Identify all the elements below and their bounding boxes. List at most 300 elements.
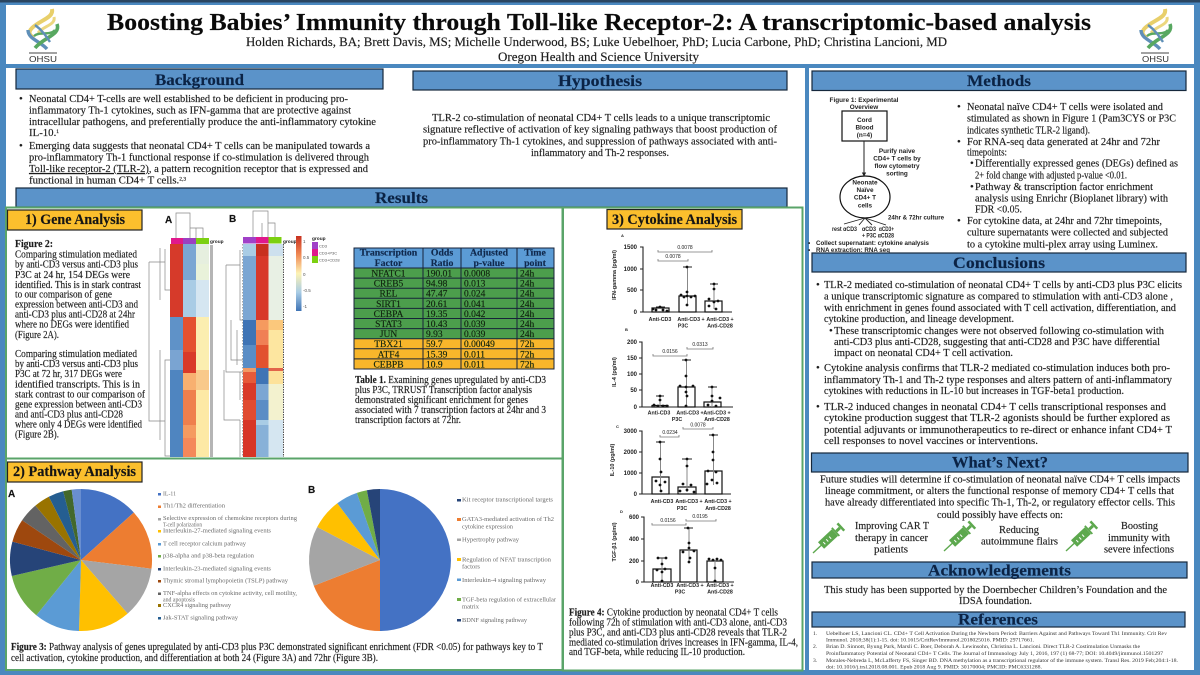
figure 4 caption: following 72h of stimulation with anti-CD3 alone, anti-CD3 <box>569 618 787 628</box>
heatmap legend: CD3 <box>319 244 328 248</box>
table 1: transcription factors <box>354 248 554 370</box>
background text: intracellular pathogens, and preferentially produce the anti-inflammatory cytokine <box>29 116 376 128</box>
pie A legend: T cell receptor calcium pathway <box>163 540 247 547</box>
figure 1: experimental overview flowchart: Neonate <box>852 180 878 186</box>
chart: IL-4 <box>612 327 733 423</box>
figure 4 caption: Figure 4: Cytokine production by neonatal CD4+ T cells <box>569 608 778 619</box>
methods text: Pathway & transcription factor enrichment <box>975 181 1153 193</box>
background text <box>19 93 376 186</box>
pie B legend: cytokine expression <box>462 523 514 530</box>
chart: IFN-gamma: 0.0078 <box>665 254 681 260</box>
conclusions text: • <box>816 401 820 413</box>
table 1: transcription factors: Ratio <box>431 258 454 269</box>
pie B legend: Interleukin-4 signaling pathway <box>462 577 547 584</box>
chart: IFN-gamma: Anti-CD3 + <box>706 317 734 323</box>
figure 1: experimental overview flowchart: cells <box>858 202 873 210</box>
conclusions text: Cytokine analysis confirms that TLR-2 mediated co-stimulation induces both pro- <box>824 362 1170 374</box>
figure 2 text <box>15 239 145 440</box>
chart: IL-10: P3C <box>677 506 687 512</box>
conclusions text: • <box>816 362 820 374</box>
acknowledgements text: This study has been supported by the Doernbecher Children’s Foundation and the <box>824 584 1167 596</box>
references list: Brian D. Sinnott, Byung Park, Marsli C. Boer, Deborah A. Lewinsohn, Christina L. Lancioni. Direct TLR-2 Costimulation Unmasks the <box>826 644 1141 650</box>
pie A legend: Jak-STAT signaling pathway <box>163 614 239 621</box>
figure 2 text: (Figure 2B). <box>15 429 59 440</box>
figure 2 text: where no DEGs were identified <box>15 320 130 331</box>
chart: TGF-beta1: 400 <box>629 537 640 543</box>
chart: IL-4: 150 <box>627 356 638 362</box>
chart: IL-10: 1000 <box>624 471 638 477</box>
conclusions text: anti-CD3 plus anti-CD28, suggesting that anti-CD28 and P3C have differential <box>834 336 1160 348</box>
table 1: transcription factors: 59.7 <box>426 340 443 350</box>
table 1: transcription factors: 72h <box>520 360 534 370</box>
figure 2 text: to our comparison of gene <box>15 290 112 301</box>
methods text: indicates synthetic TLR-2 ligand). <box>967 124 1090 136</box>
methods heading: Methods <box>967 73 1031 90</box>
panel: conclusions <box>812 253 1186 447</box>
methods text: stimulated as shown in Figure 1 (Pam3CYS or P3C <box>967 113 1176 125</box>
conclusions text: cytokine production, and lineage development. <box>824 313 1014 325</box>
pie A legend: Th1/Th2 differentiation <box>163 503 226 510</box>
hypothesis text: pro-inflammatory Th-1 cytokines, and suppression of pathways associated with anti- <box>423 136 777 148</box>
conclusions text <box>816 279 1182 447</box>
figure 1: experimental overview flowchart: CD4+ T cells by <box>873 156 921 162</box>
figure 2 text: P3C at 72 hr, 317 DEGs were <box>15 369 122 380</box>
table 1: transcription factors: 24h <box>520 320 534 330</box>
improvement text: infections: immunity with <box>1108 532 1170 544</box>
table 1: transcription factors: 24h <box>520 290 534 300</box>
references list: Uebelhoer LS, Lancioni CL. CD4+ T Cell Activation During the Newborn Period: Barriers Against and Pathways Toward Th1 Immunity. Crit Rev <box>826 631 1167 637</box>
table 1: transcription factors: 0.011 <box>464 360 485 370</box>
conclusions text: impact on neonatal CD4+ T cell activation. <box>834 347 1013 359</box>
figure 3 caption: cell activation, cytokine production, and differentiation at both 24 (Figure 3A) and 72hr (Figure 3B). <box>11 653 378 664</box>
background text: 1 <box>56 129 59 135</box>
chart: IL-4: 0.0313 <box>692 342 708 348</box>
table 1: transcription factors: REL <box>380 290 398 300</box>
figure 2 text: (Figure 2A). <box>15 330 59 341</box>
figure 2 text: identified. This is in stark contrast <box>15 280 141 291</box>
pie A legend: and apoptosis <box>163 597 195 604</box>
figure 1: experimental overview flowchart <box>808 97 944 254</box>
chart: TGF-beta1: Anti-CD28 <box>707 590 733 596</box>
logo: OHSU right <box>1141 9 1171 64</box>
acknowledgements heading <box>812 562 1187 580</box>
heatmap legend: 0.5 <box>303 255 310 260</box>
table 1: transcription factors: 0.039 <box>464 320 486 330</box>
figure 2 text: Figure 2: <box>15 239 53 250</box>
pie chart B: B <box>308 485 315 496</box>
references heading: References <box>958 612 1038 628</box>
pie B legend: matrix <box>462 604 480 611</box>
table 1: transcription factors: 0.039 <box>464 330 486 340</box>
figure 1: experimental overview flowchart: Purify naive <box>879 148 916 155</box>
pie B legend <box>457 497 557 624</box>
conclusions heading: Conclusions <box>953 255 1045 272</box>
references list: 3. <box>813 658 818 664</box>
table 1: transcription factors: 24h <box>520 280 534 290</box>
figure 2 text: by anti-CD3 versus anti-CD3 plus <box>15 259 138 270</box>
heatmap legend: -1 <box>303 304 307 309</box>
methods text: • <box>970 181 974 193</box>
improvement text: CAR T: therapy in cancer <box>855 532 928 544</box>
conclusions text: with enrichment in genes found associated with T cell activation, differentiation, and <box>824 302 1177 314</box>
methods text: culture supernatants were collected and subjected <box>967 227 1169 239</box>
conclusions heading <box>812 253 1186 272</box>
heatmap B: B <box>229 214 236 225</box>
table 1: transcription factors: Factor <box>375 258 403 269</box>
pie B legend: GATA3-mediated activation of Th2 <box>462 516 554 523</box>
figure 1: experimental overview flowchart: rest αCD3 <box>832 227 858 233</box>
figure 1: experimental overview flowchart: CD4+ T <box>854 195 876 202</box>
improvement text: infections <box>1104 520 1174 556</box>
chart: IFN-gamma: 1000 <box>624 267 638 273</box>
conclusions text: inflammatory Th-1 and Th-2 type responses and alters pattern of anti-inflammatory <box>824 374 1173 386</box>
figure 2 text: stark contrast to our comparison of <box>15 389 145 400</box>
figure 4 caption: plus P3C, and anti-CD3 plus anti-CD28 reveals that TLR-2 <box>569 628 787 638</box>
chart: TGF-beta1: 600 <box>629 515 640 521</box>
chart: IFN-gamma: Anti-CD3 + <box>677 317 705 323</box>
table 1: transcription factors: CEBPA <box>374 310 404 320</box>
improvement text: CAR T: Improving CAR T <box>855 520 929 532</box>
heatmap B: group <box>283 239 297 245</box>
panel: cytokine analysis <box>563 208 802 670</box>
chart: TGF-beta1: P3C <box>675 590 685 596</box>
pie A legend: Thymic stromal lymphopoietin (TSLP) pathway <box>163 578 289 585</box>
methods text: • <box>957 215 961 227</box>
pie A legend: Selective expression of chemokine receptors during <box>163 515 298 522</box>
panel: hypothesis <box>413 71 787 159</box>
figure 2 text: where only 4 DEGs were identified <box>15 420 143 431</box>
icon: syringe 2 <box>940 520 976 555</box>
table 1: transcription factors: Odds <box>431 248 453 258</box>
chart: IL-4: 0 <box>634 405 638 411</box>
background text: functional in human CD4+ T cells. <box>29 174 179 186</box>
table 1: transcription factors: 19.35 <box>426 310 448 320</box>
chart: IL-4: 0.0156 <box>662 349 678 355</box>
figure 2 text: anti-CD3 plus anti-CD28 at 24hr <box>15 309 135 320</box>
conclusions text: cytokines with reductions in IL-10 but increases in TGF-beta1 production. <box>824 385 1124 397</box>
hypothesis text: TLR-2 co-stimulation of neonatal CD4+ T cells leads to a unique transcriptomic <box>432 112 770 124</box>
table 1: transcription factors: JUN <box>380 330 397 340</box>
chart: IL-10: 3000 <box>624 429 638 435</box>
pie A legend: IL-11 <box>163 490 176 498</box>
chart: IFN-gamma: 0.0078 <box>677 245 693 251</box>
conclusions text: TLR-2 mediated co-stimulation of neonatal CD4+ T cells by anti-CD3 plus P3C elicits <box>824 279 1182 291</box>
methods text: FDR <0.05. <box>975 203 1022 215</box>
table 1: transcription factors: ATF4 <box>378 350 400 360</box>
background text: 2,3 <box>179 176 186 182</box>
figure 1: experimental overview flowchart: Blood <box>855 124 874 132</box>
table 1 caption: Table 1. Examining genes upregulated by anti-CD3 <box>355 375 546 386</box>
references list: Immunol. 2018;38(1):1-15. doi: 10.1615/CritRevImmunol.2018025016. PMID: 29717661. <box>826 637 1035 644</box>
chart: IL-10: 2000 <box>624 450 638 456</box>
figure 2 text: identified transcripts. This is in <box>15 379 141 390</box>
figure 1: experimental overview flowchart: RNA extraction: RNA seq <box>816 247 890 254</box>
figure 4 caption <box>569 608 798 658</box>
improvement text: autoimmune: autoimmune flairs <box>981 536 1058 548</box>
what's next text: could possibly have effects on: <box>937 509 1063 521</box>
chart: TGF-beta1: 200 <box>629 559 640 565</box>
table 1: transcription factors: 94.98 <box>426 280 448 290</box>
table 1: transcription factors: p-value <box>473 258 505 269</box>
what's next text: Future studies will determine if co-stimulation of neonatal naïve CD4+ T cells impacts <box>820 474 1180 486</box>
chart: TGF-beta1 <box>612 509 734 596</box>
figure 2 text: and anti-CD3 plus anti-CD28 <box>15 409 123 420</box>
chart: IL-10: Anti-CD28 <box>705 506 731 512</box>
table 1: transcription factors: TBX21 <box>374 340 403 350</box>
table 1: transcription factors: 9.93 <box>426 330 443 340</box>
pie A legend: CXCR4 signaling pathway <box>163 602 232 609</box>
conclusions text: cytokine production suggest that TLR-2 agonists should be further explored as <box>824 412 1170 424</box>
chart: TGF-beta1: 0 <box>636 580 640 586</box>
results banner: Results <box>375 190 428 207</box>
figure 1: experimental overview flowchart: • <box>808 247 811 254</box>
chart: IFN-gamma <box>612 233 734 330</box>
chart: IL-10: 0 <box>634 492 638 498</box>
chart: TGF-beta1: Anti-CD3 <box>651 583 673 589</box>
panel: what's next <box>809 453 1188 557</box>
table 1: transcription factors: 0.041 <box>464 300 486 310</box>
methods heading <box>812 71 1186 90</box>
pie B legend: TGF-beta regulation of extracellular <box>462 597 557 604</box>
pie B legend: Regulation of NFAT transcription <box>462 556 552 563</box>
table 1: transcription factors: 47.47 <box>426 290 448 300</box>
table 1: transcription factors: SIRT1 <box>376 300 401 310</box>
panel: pathway analysis <box>6 458 562 670</box>
logo: OHSU left <box>28 9 58 64</box>
chart: IFN-gamma: IFN-gamma (pg/ml) <box>612 250 618 300</box>
chart: IL-10: 0.0234 <box>662 430 678 436</box>
hypothesis heading: Hypothesis <box>558 73 642 90</box>
chart: IFN-gamma: Anti-CD3 <box>649 317 671 323</box>
pie A legend <box>158 490 298 621</box>
references list: 1. <box>813 631 818 637</box>
figure 2 text: Comparing stimulation mediated <box>15 249 138 260</box>
pie chart A: A <box>8 489 15 500</box>
pathway analysis heading: 2) Pathway Analysis <box>13 464 136 480</box>
heatmap A <box>149 213 224 457</box>
background text: pro-inflammatory Th-1 functional response if co-stimulation is delivered through <box>29 152 370 164</box>
chart: IL-10: 0.0078 <box>690 422 706 428</box>
chart: IL-4: Anti-CD28 <box>704 417 730 423</box>
figure 2 text: expression between anti-CD3 and <box>15 299 139 310</box>
authors: Holden Richards, BA; Brett Davis, MS; Michelle Underwood, BS; Luke Uebelhoer, PhD; Lucia Carbone, PhD; Christina Lancioni, MD <box>246 35 947 49</box>
figure 3 caption: Figure 3: Pathway analysis of genes upregulated by anti-CD3 plus P3C demonstrated significant enrichment (FDR <0.05) for pathways key to T <box>11 642 543 653</box>
pie A legend: Interleukin-27-mediated signaling events <box>163 528 271 535</box>
table 1: transcription factors: STAT3 <box>375 320 402 330</box>
table 1: transcription factors: 72h <box>520 350 534 360</box>
conclusions text: These transcriptomic changes were not observed following co-stimulation with <box>834 325 1165 337</box>
cytokine analysis heading: 3) Cytokine Analysis <box>612 212 737 228</box>
figure 1: experimental overview flowchart: Collect supernatant: cytokine analysis <box>816 240 929 247</box>
table 1: transcription factors: 24h <box>520 330 534 340</box>
figure 3 caption <box>11 642 543 664</box>
panel: acknowledgements <box>812 562 1187 607</box>
gene analysis heading: 1) Gene Analysis <box>25 212 125 228</box>
figure 1: experimental overview flowchart: αCD3+ <box>879 227 894 233</box>
table 1: transcription factors: Transcription <box>360 248 418 258</box>
pie B legend: Kit receptor transcriptional targets <box>462 497 553 504</box>
references list: Morales-Nebreda L, McLafferty FS, Singer BD. DNA methylation as a transcriptional regulator of the immune system. Transl Res. 2019 Feb;204:1-18. <box>826 657 1179 664</box>
table 1: transcription factors: 0.024 <box>464 290 486 300</box>
improvement text: infections: Boosting <box>1121 520 1158 532</box>
hypothesis heading <box>413 71 787 90</box>
chart: IL-4: Anti-CD3 + <box>676 410 704 416</box>
chart: IFN-gamma: A <box>621 233 624 238</box>
figure 1: experimental overview flowchart: flow cytometry <box>874 163 920 170</box>
figure 1: experimental overview flowchart: Cord <box>857 117 872 124</box>
figure 1: experimental overview flowchart: sorting <box>886 170 908 178</box>
what's next heading <box>812 453 1188 472</box>
figure 1: experimental overview flowchart: Naïve <box>856 187 874 194</box>
background heading <box>16 69 383 89</box>
methods text <box>957 101 1178 250</box>
what's next text: have already differentiated into specific Th-1, Th-2, or regulatory effector cells. This <box>825 497 1175 509</box>
figure 2 text: Comparing stimulation mediated <box>15 349 138 360</box>
logo: OHSU left: OHSU <box>29 55 57 64</box>
results banner <box>16 188 787 207</box>
heatmap legend: CD3+CD28 <box>319 258 340 262</box>
chart: TGF-beta1: Anti-CD3 + <box>706 583 734 589</box>
table 1: transcription factors: 24h <box>520 310 534 320</box>
pie chart A <box>8 489 152 631</box>
references list <box>813 631 1179 670</box>
figure 2 text: by anti-CD3 versus anti-CD3 plus <box>15 359 138 370</box>
table 1: transcription factors: 24h <box>520 270 534 280</box>
methods text: For RNA-seq data generated at 24hr and 72hr <box>967 136 1160 148</box>
methods text: 2+ fold change with adjusted p-value <0.01. <box>975 169 1127 181</box>
chart: TGF-beta1: D <box>620 509 623 514</box>
icon: syringe 3 <box>1062 520 1098 555</box>
what's next heading: What’s Next? <box>952 454 1048 472</box>
chart: IFN-gamma: 0 <box>634 310 638 316</box>
pie B legend: Hypertrophy pathway <box>462 537 520 544</box>
table 1 caption: transcription factors at 72hr. <box>355 415 461 426</box>
chart: IL-4: IL-4 (pg/ml) <box>612 357 618 387</box>
chart: IFN-gamma: 500 <box>627 288 638 294</box>
institution: Oregon Health and Science University <box>498 50 700 64</box>
what's next text <box>820 474 1180 521</box>
acknowledgements heading: Acknowledgements <box>928 562 1071 580</box>
improvement text: autoimmune: Reducing <box>999 524 1039 536</box>
table 1: transcription factors: Time <box>524 248 546 258</box>
chart: IFN-gamma: 1500 <box>624 245 638 251</box>
table 1: transcription factors: 0.0008 <box>464 270 490 280</box>
methods text: • <box>970 158 974 170</box>
chart: IL-10 <box>610 422 732 512</box>
table 1: transcription factors: 10.9 <box>426 360 443 370</box>
pie A legend: T-cell polarization <box>163 522 203 529</box>
chart: IL-4: Anti-CD3 + <box>703 410 731 416</box>
table 1: transcription factors: CEBPB <box>373 360 404 370</box>
acknowledgements text: IDSA foundation. <box>959 595 1032 607</box>
conclusions text: • <box>816 279 820 291</box>
chart: IL-4: P3C <box>672 417 682 423</box>
table 1: transcription factors: point <box>524 258 547 269</box>
chart: IL-10: Anti-CD3 + <box>704 499 732 505</box>
chart: TGF-beta1: 0.0156 <box>660 518 676 524</box>
chart: IFN-gamma: P3C <box>678 324 688 330</box>
figure 1: experimental overview flowchart: 24hr & 72hr culture <box>888 214 944 222</box>
conclusions text: • <box>829 325 833 337</box>
table 1: transcription factors: 0.00049 <box>464 340 495 350</box>
title: Boosting Babies’ Immunity through Toll-like Receptor-2: A transcriptomic-based analysis <box>107 10 1091 36</box>
heatmap legend: 1 <box>303 239 306 244</box>
logo: OHSU right: OHSU <box>1142 55 1169 64</box>
improvement text: infections: severe infections <box>1104 544 1174 556</box>
methods text: For cytokine data, at 24hr and 72hr timepoints, <box>967 215 1162 227</box>
pie A legend: Interleukin-23-mediated signaling events <box>163 565 271 572</box>
heatmap B <box>224 211 297 457</box>
table 1: transcription factors: 20.61 <box>426 300 448 310</box>
table 1: transcription factors: 190.01 <box>426 270 452 280</box>
gene analysis heading <box>8 210 142 230</box>
chart: IL-4: 100 <box>627 372 638 378</box>
background text: Emerging data suggests that neonatal CD4+ T cells can be manipulated towards a <box>29 140 370 152</box>
hypothesis text: inflammatory and Th-2 responses. <box>531 147 669 159</box>
pie chart B <box>308 485 451 631</box>
heatmap legend: -0.5 <box>303 288 311 293</box>
methods text: analysis using Enrichr (Bioplanet library) with <box>975 193 1169 205</box>
acknowledgements text <box>824 584 1167 607</box>
background text: • <box>19 140 23 152</box>
improvement text: CAR T: patients <box>874 544 908 556</box>
background text: Toll-like receptor-2 (TLR-2), a pattern recognition receptor that is expressed and <box>29 163 369 175</box>
table 1 caption: plus P3C, TRRUST Transcription factor analysis <box>355 385 532 396</box>
methods text: • <box>957 136 961 148</box>
conclusions text: a unique transcriptomic signature as compared to stimulation with anti-CD3 alone , <box>824 290 1173 302</box>
table 1: transcription factors: NFATC1 <box>371 270 406 280</box>
chart: TGF-beta1: 0.0195 <box>692 514 708 520</box>
background heading: Background <box>155 72 244 89</box>
background text: inflammatory Th-1 cytokines, such as IFN-gamma that are protective against <box>29 104 351 116</box>
conclusions text: potential adjuvants or immunotherapeutics to re-direct or enhance infant CD4+ T <box>824 424 1172 436</box>
table 1: transcription factors: CREB5 <box>374 280 404 290</box>
heatmap legend: 0 <box>303 272 306 277</box>
table 1: transcription factors: 24h <box>520 300 534 310</box>
pie A legend: p38-alpha and p38-beta regulation <box>163 553 255 560</box>
table 1 caption <box>355 375 546 426</box>
figure 4 caption: and TGF-beta, while reducing IL-10 production. <box>569 647 745 658</box>
table 1: transcription factors: 0.013 <box>464 280 486 290</box>
methods text: timepoints: <box>967 147 1007 159</box>
background text: Neonatal CD4+ T-cells are well established to be deficient in producing pro- <box>29 93 348 105</box>
panel: methods <box>808 71 1186 254</box>
chart: IL-4: 50 <box>630 388 638 394</box>
pie B legend: factors <box>462 563 480 570</box>
table 1: transcription factors: 15.39 <box>426 350 448 360</box>
icon: syringe 1 <box>809 522 845 557</box>
what's next text: lineage commitment, or alters the functional response of memory CD4+ T cells that <box>825 485 1174 497</box>
references heading <box>812 612 1185 628</box>
pie B legend: BDNF signaling pathway <box>462 617 528 624</box>
figure 1: experimental overview flowchart: Figure 1: Experimental <box>830 97 899 104</box>
chart: IL-10: Anti-CD3 + <box>675 499 703 505</box>
heatmap legend: CD3+P3C <box>319 250 337 256</box>
hypothesis text <box>423 112 777 159</box>
chart: IL-10: Anti-CD3 <box>651 499 673 505</box>
table 1 caption: demonstrated significant enrichment for genes <box>355 395 528 406</box>
chart: TGF-beta1: TGF-β1 (pg/ml) <box>612 522 618 562</box>
table 1 caption: associated with 7 transcription factors at 24hr and 3 <box>355 405 546 416</box>
methods text: • <box>957 101 961 113</box>
improvement text: autoimmune <box>981 524 1058 548</box>
methods text: Neonatal naïve CD4+ T cells were isolated and <box>967 101 1164 113</box>
pie A legend: TNF-alpha effects on cytokine activity, cell motility, <box>163 590 297 597</box>
chart: TGF-beta1: Anti-CD3 + <box>676 583 704 589</box>
table 1: transcription factors: 10.43 <box>426 320 448 330</box>
panel: references <box>812 612 1185 670</box>
table 1: transcription factors: Adjusted <box>470 248 509 258</box>
